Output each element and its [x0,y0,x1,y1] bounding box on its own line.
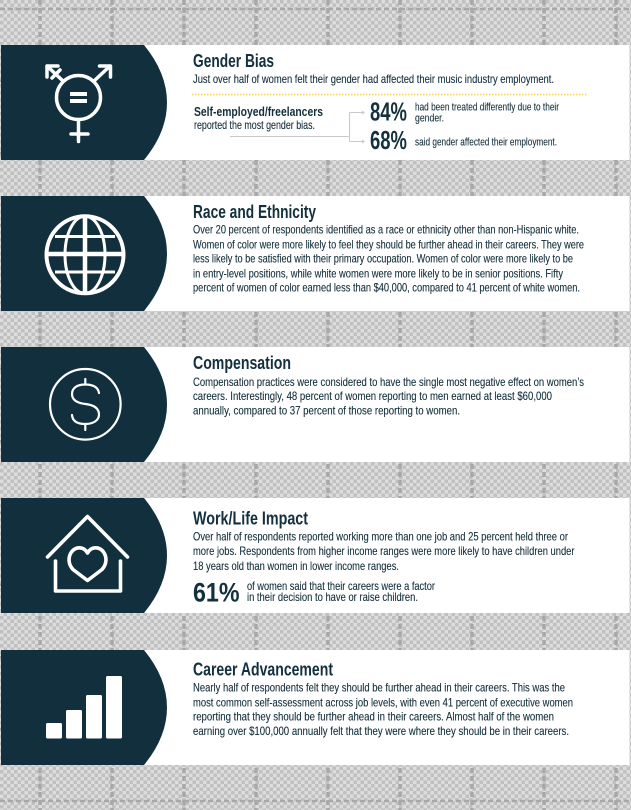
panel: career advancement [1,650,630,765]
statistic: 61 percent [193,578,435,608]
text: compensation body: careers. Interestingly, 48 percent of women reporting to men earned at least $60,000 [193,389,552,403]
icon: transgender symbol [47,66,110,142]
text: career advancement body: reporting that they should be further ahead in their careers. Almost half of the women [193,710,554,724]
arrows: connector to statistics [230,110,365,144]
statistic: 61 percent: 61% [193,578,240,608]
heading: career advancement: Career Advancement [193,660,333,680]
statistic: 84 percent: 84% [370,96,407,126]
panel: work/life impact [1,498,630,613]
icon: globe [46,216,124,294]
statistic: 84 percent [370,96,559,126]
heading: race and ethnicity: Race and Ethnicity [193,202,316,222]
callout: self-employed freelancers: reported the most gender bias. [194,118,315,132]
icon: house with heart [48,516,128,591]
callout: self-employed freelancers [194,105,323,132]
icon: rising bars [46,676,122,738]
heading: gender bias: Gender Bias [193,51,274,71]
text: race and ethnicity body [193,222,584,295]
statistic: 84 percent: gender. [415,112,444,124]
text: work/life body [193,530,574,573]
statistic: 61 percent: of women said that their careers were a factor [247,579,435,593]
text: career advancement body [193,681,573,738]
divider: yellow dotted line [192,94,587,96]
text: work/life body: 18 years old than women in lower income ranges. [193,559,399,573]
panel: gender bias [1,45,630,160]
callout: self-employed freelancers: Self-employed/freelancers [194,105,323,119]
statistic: 68 percent: 68% [370,125,407,155]
statistic: 68 percent [370,125,557,155]
statistic: 84 percent: had been treated differently due to their [415,102,559,114]
panel: race and ethnicity [1,196,630,311]
heading: compensation: Compensation [193,353,291,373]
heading: work/life impact: Work/Life Impact [193,508,308,528]
statistic: 68 percent: said gender affected their employment. [415,136,557,148]
statistic: 61 percent: in their decision to have or raise children. [247,590,418,604]
text: compensation body: annually, compared to 37 percent of those reporting to women. [193,403,460,417]
text: compensation body [193,375,584,417]
icon: dollar sign in circle [50,369,121,440]
panel: compensation [1,347,630,462]
